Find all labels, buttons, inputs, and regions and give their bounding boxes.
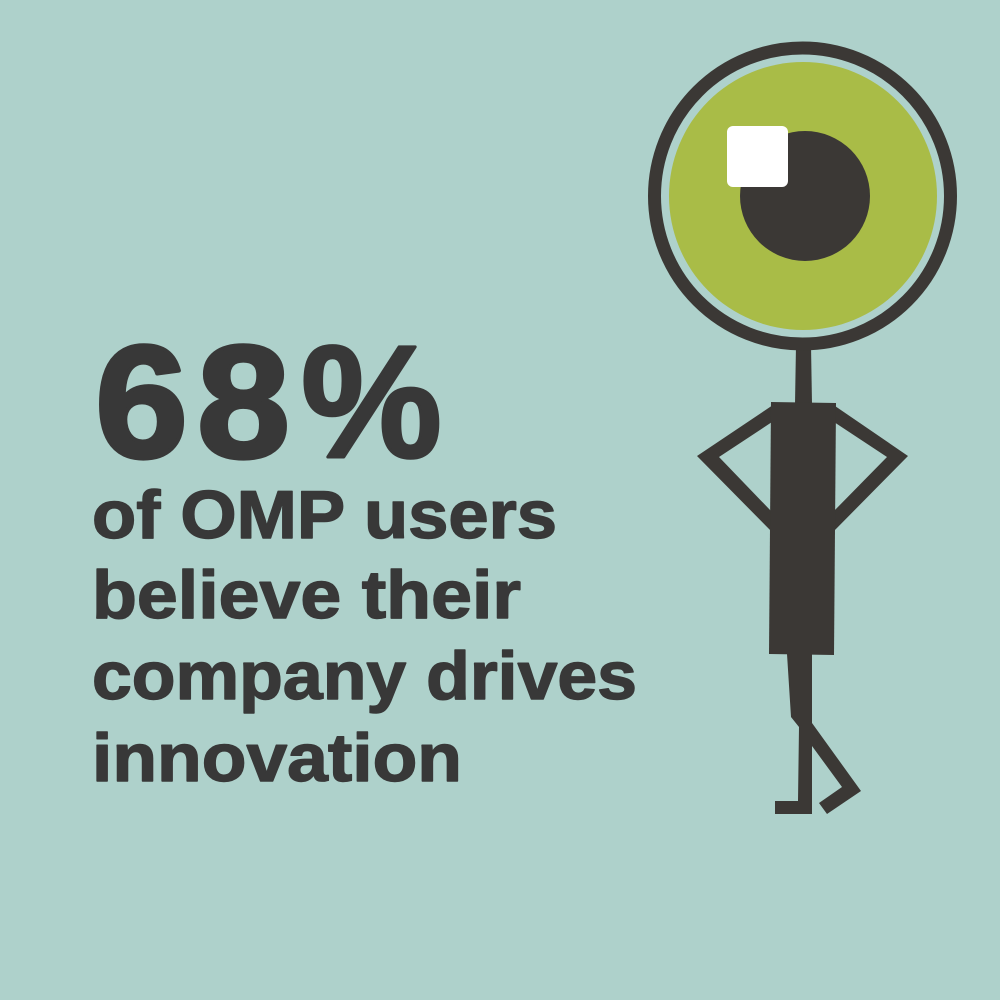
- figure legs: [775, 654, 861, 814]
- figure neck: [795, 345, 812, 404]
- figure left arm: [697, 405, 773, 531]
- eye pupil: [740, 131, 870, 261]
- eye ring: [654, 48, 950, 344]
- figure torso: [769, 402, 836, 655]
- figure right arm: [833, 406, 908, 532]
- description line 1: of OMP users: [92, 477, 557, 553]
- icon: eye-headed stick figure: [654, 48, 950, 814]
- big statistic: 68%: [95, 312, 442, 491]
- description line 4: innovation: [92, 720, 462, 796]
- eye highlight: [727, 126, 788, 187]
- eye iris: [669, 62, 937, 330]
- big statistic: 68%: %: [301, 312, 442, 491]
- big statistic: 68%: 6: [95, 312, 188, 491]
- description line 3: company drives: [92, 638, 637, 714]
- big statistic: 68%: 8: [197, 312, 290, 491]
- description line 2: believe their: [92, 557, 521, 633]
- text block: statistic and description: [92, 312, 637, 796]
